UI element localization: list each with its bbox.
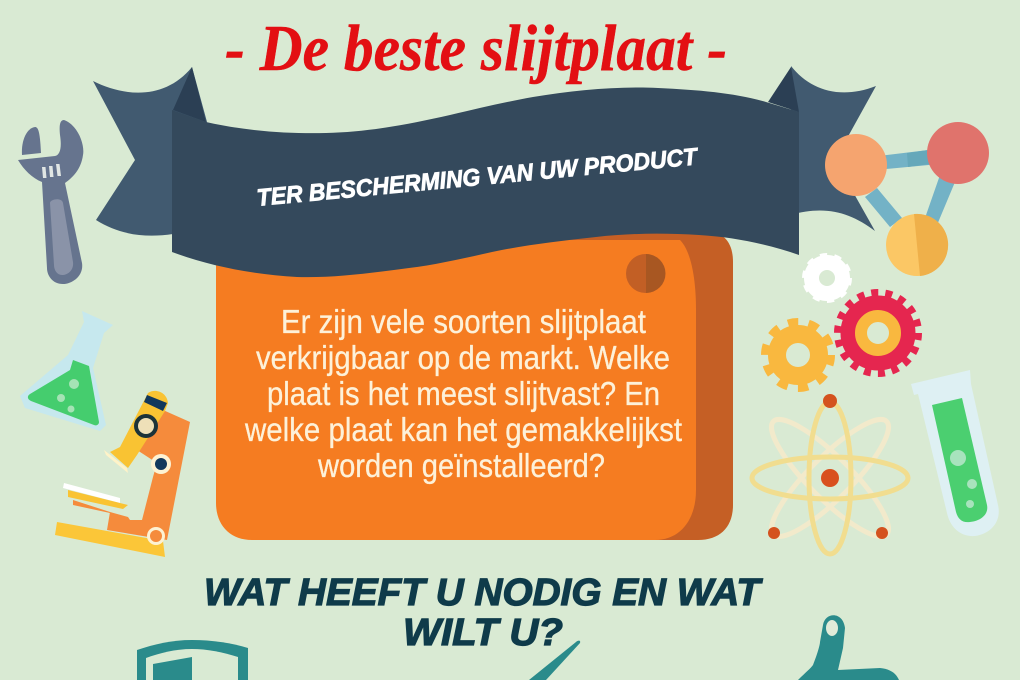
icon: thumbs up (798, 615, 899, 680)
icon: card hole (626, 254, 666, 293)
icon: yellow gear (765, 322, 831, 388)
icon: white gear (805, 256, 849, 300)
icon: check mark (529, 641, 580, 680)
icon: wrench (18, 120, 83, 284)
ribbon left wing (93, 67, 207, 236)
heading: WAT HEEFT U NODIG EN WAT (204, 572, 763, 614)
icon: flask (20, 311, 113, 431)
panel: orange intro card (216, 232, 733, 540)
intro text (244, 303, 682, 484)
ribbon subtitle: TER BESCHERMING VAN UW PRODUCT (256, 143, 700, 212)
icon: shield (137, 640, 248, 680)
intro text: worden geïnstalleerd? (317, 447, 605, 484)
ribbon right fold (768, 67, 799, 112)
intro text: plaat is het meest slijtvast? En (267, 375, 660, 412)
intro text: Er zijn vele soorten slijtplaat (281, 303, 646, 340)
ribbon banner (93, 66, 876, 277)
heading: WILT U? (403, 612, 563, 654)
card side (300, 232, 733, 540)
ribbon left fold (173, 67, 206, 122)
card front (216, 240, 696, 540)
icon: atom (752, 394, 908, 554)
ribbon right wing (790, 66, 876, 231)
icon: red gear (838, 293, 918, 373)
intro text: welke plaat kan het gemakkelijkst (244, 411, 682, 448)
heading (204, 572, 763, 654)
icon: molecule (825, 122, 989, 276)
icon: microscope (55, 391, 190, 557)
ribbon main band (172, 87, 799, 277)
title: - De beste slijtplaat - (225, 12, 727, 85)
icon: test tube (911, 370, 999, 536)
intro text: verkrijgbaar op de markt. Welke (256, 339, 670, 376)
